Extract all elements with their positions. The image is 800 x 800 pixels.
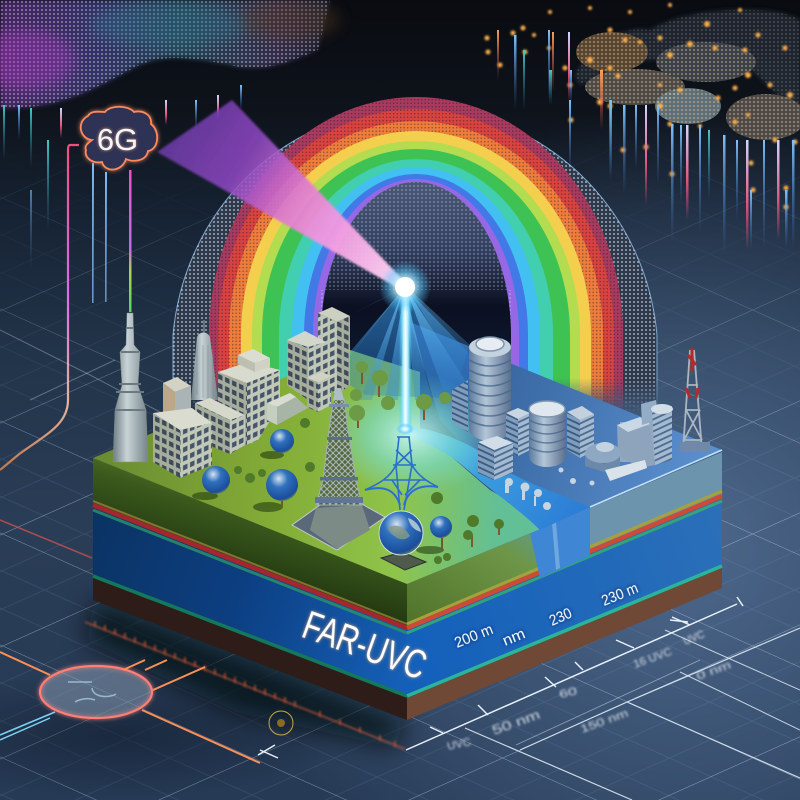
building mid rear [287, 331, 326, 400]
outer colour bands [209, 97, 623, 430]
box tower right [567, 406, 594, 458]
light rays fan [335, 287, 490, 400]
block shadow [85, 598, 407, 748]
low slab [605, 460, 647, 481]
low round building [585, 442, 621, 472]
slab behind cylinder [452, 380, 468, 432]
red ruler ticks on floor [85, 621, 405, 749]
left skyline [113, 307, 350, 478]
cloud blob 4 [726, 94, 800, 140]
UVC right: UVC [682, 628, 707, 648]
eiffel style tower [292, 388, 385, 550]
cloud blob 3 [655, 88, 721, 124]
waterfall [530, 507, 590, 578]
building tall rear [318, 307, 350, 395]
cyan scale lines [0, 712, 55, 740]
150 nm: 150 nm [579, 707, 630, 736]
large globe on stand [379, 511, 426, 570]
globe 1 [270, 429, 294, 453]
6G label: 6G [97, 122, 138, 157]
cloud blob 2 [656, 42, 756, 82]
230: 230 [547, 605, 575, 630]
ground glow [327, 373, 497, 497]
rainbow spectrum arch [173, 97, 657, 430]
focal point glow [379, 261, 431, 313]
grass wall right [407, 525, 556, 626]
orange light nodes [484, 3, 798, 210]
lens circle callout [0, 652, 260, 763]
60: 60 [558, 685, 578, 701]
ground scale labels [446, 628, 733, 753]
box tower [506, 408, 530, 456]
lens glyph [68, 682, 116, 702]
outer dotted mesh band [172, 134, 658, 408]
side: brown left [93, 578, 407, 720]
vertical cyan beam [396, 290, 414, 435]
building small annex [307, 372, 331, 412]
top-left data cloud mesh [0, 0, 340, 108]
red lattice tower [680, 348, 710, 452]
globe 2 [202, 466, 230, 494]
river [408, 426, 590, 530]
50 nm: 50 nm [490, 707, 542, 738]
building large [218, 349, 280, 445]
right cluster [617, 400, 673, 468]
blue land top [410, 322, 722, 528]
FAR-UVC label: FAR-UVC [297, 603, 432, 688]
cloud mesh dots [576, 32, 800, 140]
cloud blob 1 [585, 69, 685, 105]
ruler along block base [406, 597, 800, 800]
circuit line from cloud [0, 145, 79, 470]
6G cloud [81, 107, 157, 170]
purple light beam [157, 100, 405, 292]
rainbow stripe right [407, 491, 722, 633]
UVC left: UVC [446, 736, 472, 753]
cloud blob 5 [576, 32, 648, 72]
230 n: 230 m [599, 580, 641, 610]
globe trees [202, 429, 452, 550]
nm: nm [500, 625, 528, 650]
building front left [153, 408, 212, 478]
inner dark arch [321, 182, 511, 430]
spire building [191, 320, 218, 400]
top-right orange data clouds [484, 3, 800, 210]
vertical light streaks [3, 30, 794, 303]
grass top [93, 350, 550, 584]
right wall upper [545, 452, 722, 570]
cloud to tower fibre lines [92, 163, 132, 312]
side: blue right [407, 499, 722, 697]
mid cylinder [529, 401, 566, 467]
rainbow stripe left [93, 501, 407, 633]
small gold gauge icon [258, 711, 293, 758]
right skyline [452, 337, 710, 510]
16 UVC: 16 UVC [632, 646, 674, 671]
tall antenna tower [113, 313, 148, 462]
front box [478, 436, 513, 480]
wavelength labels [452, 580, 641, 652]
blue wireframe tower [365, 437, 438, 510]
trees and bushes [234, 361, 504, 564]
side: brown right [407, 567, 722, 720]
orange scale lines [0, 652, 260, 763]
small figures and objects [505, 468, 594, 510]
glowing grid accent lines left [0, 145, 175, 558]
200 m: 200 m [452, 621, 496, 652]
globe 3 [266, 469, 298, 506]
stripe: green lower [93, 566, 722, 696]
grass wall left [93, 458, 407, 626]
isometric block [93, 322, 722, 720]
inner colour bands [241, 131, 591, 396]
side: blue left [93, 508, 407, 697]
building small back [163, 377, 191, 420]
large cylinder tower [469, 337, 511, 441]
globe shadows [192, 451, 444, 554]
globe 4 [430, 516, 452, 550]
building middle low [195, 398, 245, 454]
0 nm: 0 nm [695, 659, 733, 683]
building low front [267, 393, 308, 425]
